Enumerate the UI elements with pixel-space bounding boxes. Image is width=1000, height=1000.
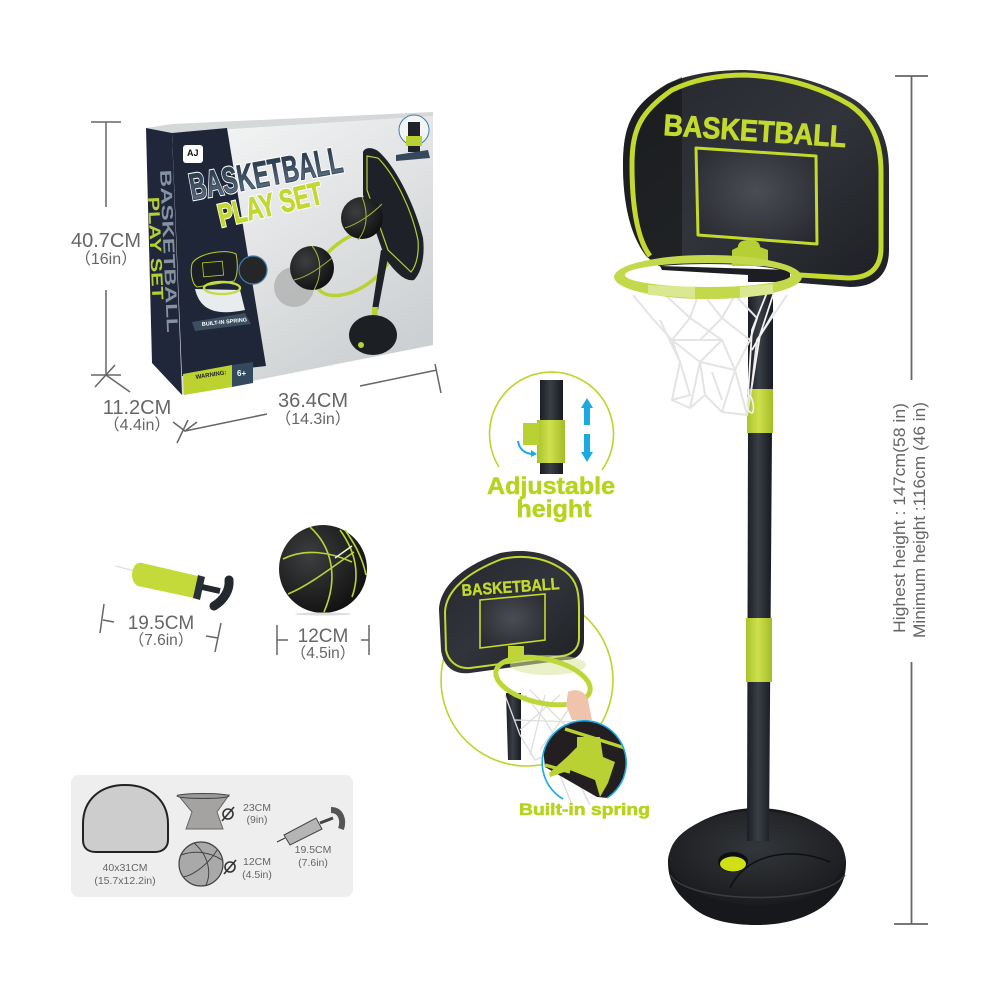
spring bracket <box>508 646 524 660</box>
box title line 2 <box>214 175 326 234</box>
dimension: ball <box>277 625 369 655</box>
backboard trim <box>632 75 881 278</box>
callout: adjustable height <box>487 372 615 523</box>
label: pump 7.6in: （7.6in） <box>129 632 193 649</box>
label: 4.4in: （4.4in） <box>104 416 170 434</box>
dimension: pump <box>100 604 221 652</box>
icon: net outline <box>177 794 229 829</box>
box logo: AJ <box>187 148 199 158</box>
spring backboard <box>439 551 584 673</box>
box dark side panel <box>172 128 266 376</box>
box title line 2: PLAY SET <box>214 175 326 234</box>
spring pole <box>506 693 521 760</box>
product: hoop stand <box>614 70 889 925</box>
box title line 2: PLAY SET <box>214 175 326 234</box>
hoop rim <box>614 255 802 299</box>
box warning label: WARNING: <box>195 370 227 381</box>
text: net size: 23CM <box>243 802 271 814</box>
box lower ball <box>290 246 334 290</box>
label: highest height: Highest height : 147cm(58 in) <box>891 403 909 633</box>
panel: parts list <box>71 775 353 897</box>
net front strands <box>748 290 775 395</box>
icon: diameter symbol 2 <box>224 860 236 874</box>
text: backboard size: 40x31CM <box>103 862 147 874</box>
label: 16in: （16in） <box>75 250 137 268</box>
net <box>633 290 787 415</box>
spring rim ghost <box>510 655 586 675</box>
label: ball 12CM: 12CM <box>298 626 348 647</box>
icon: down arrow <box>581 434 593 462</box>
spine subtitle: PLAY SET <box>144 196 165 300</box>
box upper ball <box>341 197 383 240</box>
rim highlight left <box>648 285 695 298</box>
rim highlight right <box>740 284 773 298</box>
box top flap <box>146 112 433 133</box>
label: 11.2CM: 11.2CM <box>103 397 171 419</box>
backboard left shade <box>623 77 682 267</box>
board behind rim <box>660 266 790 282</box>
spring backboard trim <box>445 557 579 668</box>
icon: air pump <box>116 563 229 606</box>
inset: spring detail <box>540 720 630 805</box>
net hook <box>747 395 753 413</box>
box title line 1: BASKETBALL <box>186 139 346 208</box>
label: 14.3in: （14.3in） <box>275 410 351 428</box>
box age badge <box>232 362 253 387</box>
dimension: box width and depth <box>173 364 441 443</box>
box corner badge <box>396 115 430 161</box>
upper sleeve <box>747 389 773 433</box>
box spine <box>146 128 182 395</box>
icon: diameter symbol <box>222 807 234 821</box>
lower pole <box>747 430 772 841</box>
spine title: BASKETBALL <box>156 169 180 333</box>
stand base <box>668 808 846 925</box>
backboard <box>623 70 889 287</box>
box pole and base <box>349 250 397 355</box>
stand filler cap <box>718 852 748 872</box>
box inset label <box>192 313 251 331</box>
spring ring <box>441 594 613 766</box>
box age badge: 6+ <box>237 369 246 378</box>
callout title line 2: height <box>516 496 592 523</box>
callout knob <box>523 423 539 445</box>
icon: basketball <box>279 525 367 616</box>
lower sleeve <box>746 618 772 682</box>
box warning label <box>183 365 232 395</box>
callout ring <box>490 372 614 470</box>
box inset backboard <box>191 252 267 312</box>
backboard window <box>696 148 817 244</box>
product box <box>144 112 433 395</box>
callout: built-in spring <box>439 551 650 819</box>
text: ball size: 12CM <box>243 856 271 868</box>
spring backboard window <box>480 594 545 648</box>
hoop bracket <box>732 240 768 266</box>
icon: hand <box>566 690 592 720</box>
icon: rotate arrow <box>518 441 537 457</box>
box inset label: BUILT-IN SPRING <box>202 317 247 328</box>
box motion ball <box>274 267 314 307</box>
spring label: Built-in spring <box>519 800 650 819</box>
label: 36.4CM: 36.4CM <box>278 390 348 412</box>
icon: backboard outline <box>83 785 168 852</box>
callout title line 1: Adjustable <box>487 473 615 500</box>
label: minimum height: Minimum height :116cm (46 in) <box>911 402 929 638</box>
label: 40.7CM: 40.7CM <box>71 230 141 252</box>
spring rim <box>491 650 595 712</box>
text: pump size inches: (7.6in) <box>298 857 328 869</box>
callout sleeve <box>537 420 565 463</box>
spring net <box>505 690 582 760</box>
backboard title: BASKETBALL <box>663 109 847 154</box>
rim interior <box>624 264 792 288</box>
box logo <box>183 145 203 163</box>
label: ball 4.5in: （4.5in） <box>291 645 355 662</box>
text: ball size inches: (4.5in) <box>242 869 272 881</box>
callout pole <box>540 380 563 474</box>
text: net size inches: (9in) <box>246 814 268 826</box>
box tilted backboard <box>363 148 424 280</box>
icon: up arrow <box>581 398 593 425</box>
box title line 1: BASKETBALL <box>186 139 346 208</box>
box hoop <box>304 217 404 309</box>
text: backboard size inches: (15.7x12.2in) <box>94 875 156 887</box>
dimension: box height <box>91 122 130 392</box>
label: pump 19.5CM: 19.5CM <box>128 613 194 634</box>
box front face <box>172 116 433 395</box>
spring backboard text: BASKETBALL <box>461 575 560 600</box>
box title line 1 <box>186 139 346 208</box>
icon: ball outline <box>179 842 223 886</box>
upper pole <box>748 285 773 395</box>
text: pump size: 19.5CM <box>295 844 331 856</box>
icon: pump outline <box>277 810 342 845</box>
dimension: total height <box>894 76 928 924</box>
